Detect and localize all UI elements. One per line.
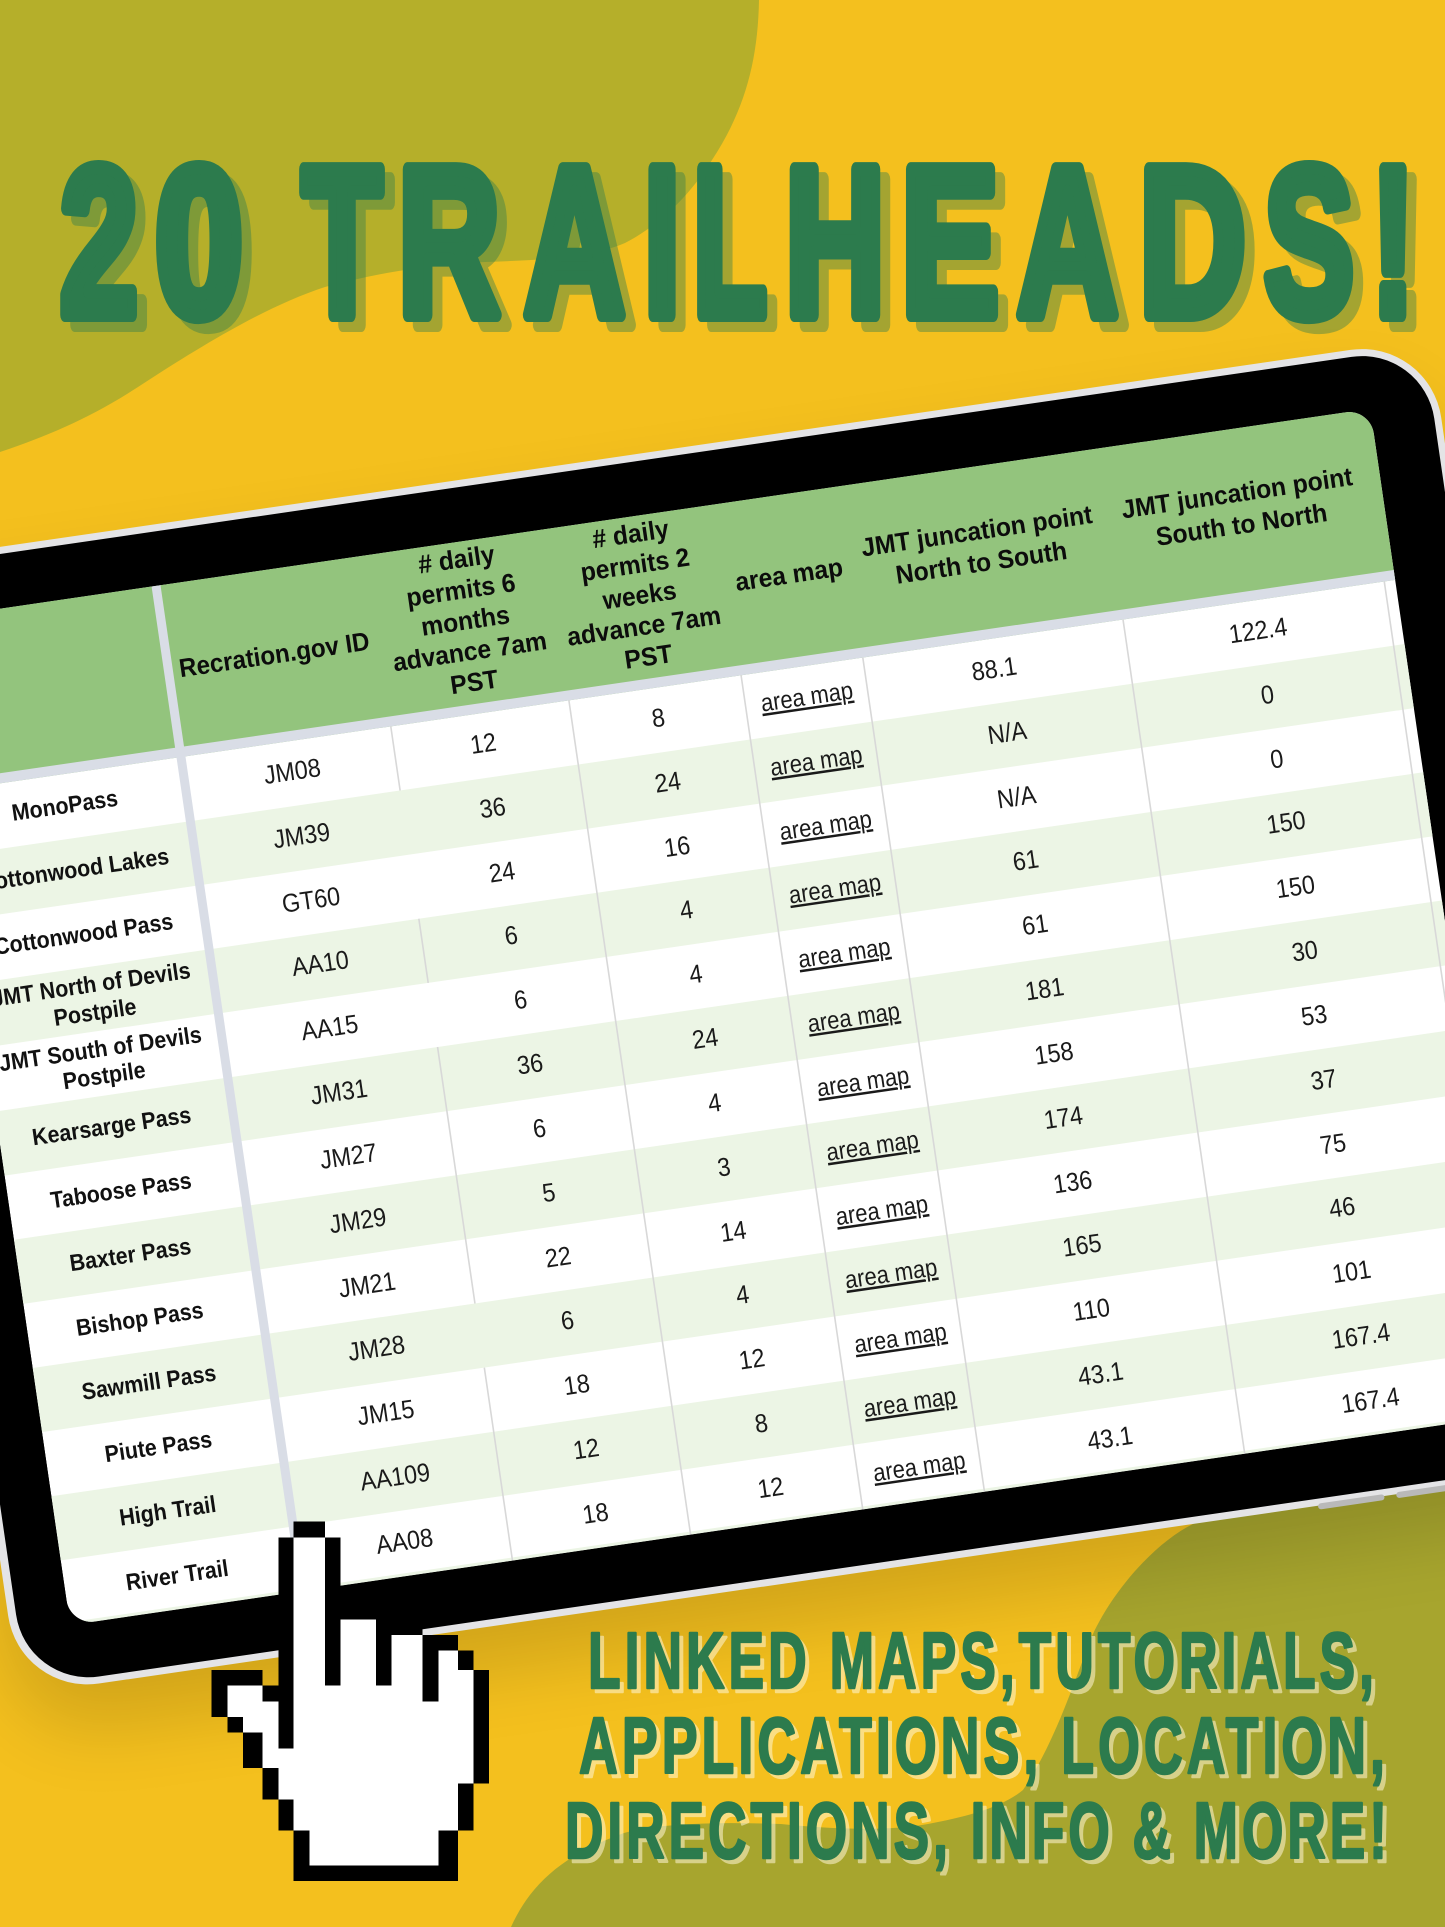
area map links column: area map xyxy=(806,997,902,1037)
permits 2 weeks column: 3 xyxy=(716,1153,733,1183)
recreation.gov id column: JM28 xyxy=(346,1331,407,1367)
permits 6 months column xyxy=(468,728,611,1530)
header labels: permits 6 xyxy=(405,569,517,613)
JMT junction south to north column: 122.4 xyxy=(1227,613,1289,650)
JMT junction north to south column: 61 xyxy=(1020,910,1050,941)
permits 6 months column: 12 xyxy=(571,1434,601,1466)
trail name column: MonoPass xyxy=(10,785,120,826)
header labels: South to North xyxy=(1154,499,1329,552)
JMT junction north to south column: 43.1 xyxy=(1086,1422,1135,1456)
header labels: advance 7am xyxy=(565,601,723,652)
trail name column: Kearsarge Pass xyxy=(30,1102,193,1151)
area map links column: area map xyxy=(796,932,892,973)
JMT junction south to north column xyxy=(1227,613,1402,1419)
background blob: top left xyxy=(0,0,759,452)
JMT junction north to south column: N/A xyxy=(986,717,1029,750)
permits 6 months column: 24 xyxy=(487,857,517,889)
trail name column: River Trail xyxy=(124,1555,230,1596)
header labels: weeks xyxy=(600,576,678,616)
JMT junction south to north column: 53 xyxy=(1299,1000,1329,1032)
permits 2 weeks column: 24 xyxy=(690,1023,720,1055)
trail name column: Postpile xyxy=(52,993,138,1031)
area map links column: area map xyxy=(834,1190,930,1230)
JMT junction north to south column: 165 xyxy=(1061,1229,1103,1263)
permits 6 months column: 18 xyxy=(581,1498,611,1530)
permits 2 weeks column: 8 xyxy=(753,1409,770,1439)
recreation.gov id column: JM21 xyxy=(337,1268,398,1304)
permits 2 weeks column: 14 xyxy=(718,1216,749,1248)
area map links column: area map xyxy=(862,1382,958,1422)
striped rows xyxy=(0,643,1445,1627)
header labels: months xyxy=(419,601,512,642)
trail name column: Sawmill Pass xyxy=(80,1360,218,1405)
permits 2 weeks column: 4 xyxy=(687,960,705,990)
title: H xyxy=(785,123,885,360)
permits 2 weeks column: 16 xyxy=(662,832,692,863)
header labels: Recration.gov ID xyxy=(177,627,371,683)
JMT junction south to north column: 75 xyxy=(1318,1129,1348,1161)
permits 2 weeks column: 4 xyxy=(734,1281,751,1311)
area map links column: area map xyxy=(843,1253,939,1294)
title: S xyxy=(1264,123,1354,360)
JMT junction north to south column: 61 xyxy=(1011,845,1041,877)
header labels: area map xyxy=(733,553,845,597)
JMT junction south to north column: 150 xyxy=(1265,806,1307,840)
permits 6 months column: 6 xyxy=(559,1306,576,1336)
trail name column xyxy=(0,794,228,1590)
title: 2 xyxy=(60,123,138,360)
area map links column: area map xyxy=(824,1125,920,1166)
header labels: advance 7am xyxy=(391,627,549,677)
permits 2 weeks column: 4 xyxy=(706,1089,723,1119)
header labels: # daily xyxy=(591,515,671,554)
title: D xyxy=(1139,123,1246,360)
permits 2 weeks column: 12 xyxy=(756,1473,786,1505)
JMT junction south to north column: 167.4 xyxy=(1339,1383,1402,1419)
title: A xyxy=(1017,123,1118,360)
JMT junction north to south column: 43.1 xyxy=(1076,1357,1125,1392)
subtitle text xyxy=(565,1616,1391,1875)
icon: pixel hand cursor xyxy=(212,1522,489,1881)
JMT junction north to south column xyxy=(970,652,1135,1457)
area map links column: area map xyxy=(759,676,855,717)
area map links column: area map xyxy=(768,740,864,781)
trail name column: JMT South of Devils xyxy=(0,1021,203,1077)
permits 6 months column: 36 xyxy=(478,793,508,825)
title xyxy=(60,123,1415,360)
header labels xyxy=(180,468,1354,694)
JMT junction south to north column: 37 xyxy=(1309,1065,1339,1096)
trail name column: Postpile xyxy=(61,1057,147,1095)
header labels: PST xyxy=(623,640,675,675)
recreation.gov id column: JM39 xyxy=(271,818,332,855)
JMT junction south to north column: 0 xyxy=(1268,745,1285,775)
tablet side button left xyxy=(1318,1494,1385,1510)
tablet black bezel xyxy=(0,346,1445,1687)
JMT junction south to north column: 150 xyxy=(1274,871,1317,904)
JMT junction south to north column: 101 xyxy=(1330,1256,1373,1289)
recreation.gov id column: AA10 xyxy=(290,946,351,982)
area map links column: area map xyxy=(815,1061,911,1102)
permits 2 weeks column: 8 xyxy=(650,704,667,734)
JMT junction north to south column: 181 xyxy=(1023,973,1066,1007)
background blob: bottom right xyxy=(511,1480,1445,1927)
header labels: PST xyxy=(449,665,501,700)
permits 2 weeks column: 12 xyxy=(737,1344,767,1376)
JMT junction south to north column: 167.4 xyxy=(1330,1319,1392,1355)
trail name column: Bishop Pass xyxy=(74,1297,205,1341)
permits 6 months column: 6 xyxy=(531,1114,548,1144)
recreation.gov id column xyxy=(265,758,432,1554)
trail name column: High Trail xyxy=(118,1491,218,1531)
permits 2 weeks column: 4 xyxy=(678,896,695,926)
permits 2 weeks column: 24 xyxy=(653,767,683,799)
title: L xyxy=(693,123,767,360)
tablet side button right xyxy=(1396,1481,1445,1498)
tablet drop shadow xyxy=(0,382,1445,1738)
trail name column: Taboose Pass xyxy=(49,1167,193,1214)
area map links column: area map xyxy=(871,1446,967,1487)
JMT junction north to south column: N/A xyxy=(995,781,1038,815)
recreation.gov id column: JM08 xyxy=(262,754,323,790)
header labels: JMT juncation point xyxy=(859,500,1095,563)
permits 6 months column: 36 xyxy=(515,1049,545,1081)
permits 6 months column: 6 xyxy=(512,986,529,1016)
title: A xyxy=(524,123,625,360)
header labels: permits 2 xyxy=(579,543,691,587)
recreation.gov id column: JM29 xyxy=(328,1203,388,1240)
title: R xyxy=(398,123,500,360)
title: T xyxy=(302,123,382,360)
JMT junction south to north column: 30 xyxy=(1290,936,1320,968)
header band xyxy=(0,408,1400,791)
JMT junction south to north column: 46 xyxy=(1327,1192,1357,1224)
permits 6 months column: 6 xyxy=(503,921,520,951)
area map links column: area map xyxy=(787,868,883,909)
header labels: North to South xyxy=(894,537,1069,590)
permits 6 months column: 5 xyxy=(540,1179,557,1209)
recreation.gov id column: AA15 xyxy=(299,1010,360,1047)
JMT junction south to north column: 0 xyxy=(1259,681,1276,711)
area map links column: area map xyxy=(778,805,874,846)
JMT junction north to south column: 158 xyxy=(1033,1037,1075,1071)
permits 2 weeks column xyxy=(644,703,786,1505)
title: I xyxy=(644,123,680,360)
recreation.gov id column: JM31 xyxy=(309,1075,369,1111)
recreation.gov id column: JM27 xyxy=(318,1139,379,1175)
area map links column: area map xyxy=(852,1317,948,1358)
trail name column: Piute Pass xyxy=(103,1426,214,1467)
JMT junction north to south column: 136 xyxy=(1051,1166,1094,1200)
permits 6 months column: 18 xyxy=(562,1370,592,1401)
recreation.gov id column: JM15 xyxy=(356,1395,416,1432)
permits 6 months column: 12 xyxy=(468,728,498,760)
recreation.gov id column: AA109 xyxy=(358,1459,432,1497)
title: 0 xyxy=(155,123,243,360)
trail name column: Baxter Pass xyxy=(68,1233,193,1276)
header labels: # daily xyxy=(416,540,497,580)
tablet frame edge xyxy=(0,338,1445,1695)
JMT junction north to south column: 88.1 xyxy=(970,652,1019,687)
spreadsheet screen xyxy=(0,408,1445,1627)
title: ! xyxy=(1371,123,1415,360)
JMT junction north to south column: 174 xyxy=(1042,1102,1085,1135)
recreation.gov id column: AA08 xyxy=(374,1524,435,1560)
recreation.gov id column: GT60 xyxy=(280,883,342,919)
title: E xyxy=(901,123,999,360)
permits 6 months column: 22 xyxy=(543,1242,573,1274)
area map links column xyxy=(759,676,967,1487)
header labels: JMT juncation point xyxy=(1120,462,1355,525)
tablet xyxy=(0,338,1445,1699)
JMT junction north to south column: 110 xyxy=(1071,1294,1112,1327)
